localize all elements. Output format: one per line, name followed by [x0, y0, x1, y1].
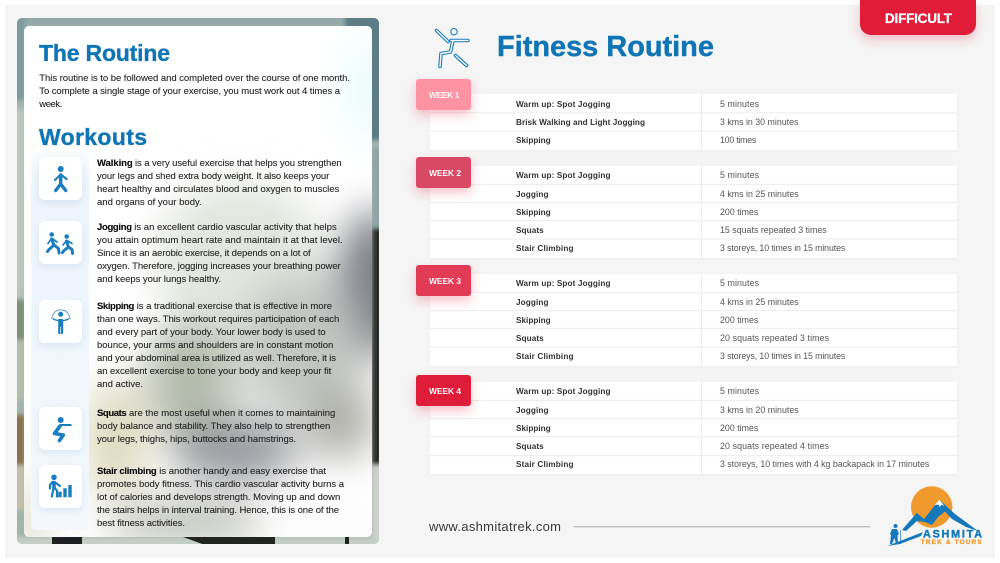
icon: walking	[39, 157, 82, 200]
icon strip	[31, 152, 89, 530]
text: jogging: and keeps your lungs healthy.	[97, 274, 221, 285]
logo: Ashmita Trek and Tours: TREK & TOURS	[921, 539, 982, 546]
table: week 4: 5 minutes	[720, 386, 760, 396]
text: skipping: and every part of your body. Your lower body is used to	[97, 327, 326, 338]
table: week 2: 15 squats repeated 3 times	[720, 225, 827, 235]
text: squats: body balance and stability. They also help to strengthen	[97, 421, 330, 432]
text: jogging: Since it is an aerobic exercise, it depends on a lot of	[97, 248, 311, 259]
text: walking	[97, 158, 342, 208]
table: week 1: 100 times	[720, 135, 757, 145]
footer rule	[574, 526, 870, 528]
text: squats: your legs, thighs, hips, buttocks and hamstrings.	[97, 434, 296, 445]
table: week 3: 200 times	[720, 315, 759, 325]
frosted glass card	[24, 26, 372, 537]
table: week 2: Skipping	[516, 208, 551, 217]
table: week 4: Skipping	[516, 424, 551, 433]
text: walking: Walking	[97, 158, 133, 169]
text: stair climbing: lot of calories and develops strength. Moving up and down	[97, 492, 340, 503]
table: week 2: Stair Climbing	[516, 244, 574, 253]
table: week 2	[416, 157, 957, 258]
text: stair climbing: is another handy and easy exercise that	[159, 466, 326, 477]
text: stair climbing: the stairs helps in interval training. Hence, this is one of the	[97, 505, 339, 516]
tag: week 4	[416, 375, 471, 406]
text: skipping: bounce, your arms and shoulders are in constant motion	[97, 340, 333, 351]
tag: week 3: WEEK 3	[429, 276, 461, 286]
table: week 4: Stair Climbing	[516, 460, 574, 469]
table: week 1: 3 kms in 30 minutes	[720, 117, 799, 127]
table: week 4: 20 squats repeated 4 times	[720, 441, 830, 451]
text: stair climbing	[97, 466, 345, 529]
table: week 2: 3 storeys, 10 times in 15 minutes	[720, 243, 846, 253]
table: week 3: Warm up: Spot Jogging	[516, 279, 610, 288]
text: skipping: is a traditional exercise that is effective in more	[137, 301, 332, 312]
text: skipping: and your abdominal area is utilized as well. Therefore, it is	[97, 353, 336, 364]
text: jogging	[97, 222, 343, 285]
text: stair climbing: best fitness activities.	[97, 518, 185, 529]
table: week 2: 200 times	[720, 207, 759, 217]
logo: Ashmita Trek and Tours: ASHMITA	[923, 528, 982, 540]
table: week 3: 5 minutes	[720, 278, 760, 288]
table: week 1: Warm up: Spot Jogging	[516, 100, 610, 109]
table: week 3: 3 storeys, 10 times in 15 minutes	[720, 351, 846, 361]
text: jogging: you attain optimum heart rate and maintain it at that level.	[97, 235, 343, 246]
text: routine intro: This routine is to be followed and completed over the course of one month.	[39, 73, 350, 84]
icon: skipping	[39, 300, 82, 343]
text: routine intro	[38, 73, 350, 110]
text: squats: Squats	[97, 408, 127, 419]
text: walking: and organs of your body.	[97, 197, 202, 208]
table: week 1: 5 minutes	[720, 99, 760, 109]
panel: routine and workouts	[17, 18, 379, 544]
table: week 1: Skipping	[516, 136, 551, 145]
table: week 4: 3 storeys, 10 times with 4 kg backapack in 17 minutes	[720, 459, 930, 469]
badge: difficult	[860, 0, 976, 35]
text: walking: is a very useful exercise that helps you strengthen	[135, 158, 342, 169]
text: walking: heart healthy and circulates blood and oxygen to muscles	[97, 184, 340, 195]
text: squats: are the most useful when it comes to maintaining	[129, 408, 335, 419]
text: routine intro: To complete a single stage of your exercise, you must work out 4 times a	[39, 86, 341, 97]
text: jogging: Jogging	[97, 222, 132, 233]
text: stair climbing: promotes body fitness. This cardio vascular activity burns a	[97, 479, 345, 490]
tag: week 1	[416, 79, 471, 110]
table: week 4: Warm up: Spot Jogging	[516, 387, 610, 396]
tag: week 2: WEEK 2	[429, 168, 461, 178]
table: week 2: 5 minutes	[720, 170, 760, 180]
text: skipping: an excellent exercise to tone your body and keep your fit	[97, 366, 332, 377]
table: week 3: Skipping	[516, 316, 551, 325]
logo: Ashmita Trek and Tours	[887, 486, 982, 546]
tag: week 3	[416, 265, 471, 296]
table: week 4: Jogging	[516, 406, 548, 415]
table: week 3: Jogging	[516, 298, 548, 307]
table: week 2: Jogging	[516, 190, 548, 199]
text: jogging: oxygen. Therefore, jogging increases your breathing power	[97, 261, 341, 272]
text: routine intro: week.	[38, 99, 62, 110]
icon: jogging	[39, 221, 82, 264]
tag: week 2	[416, 157, 471, 188]
icon: fitness figure	[436, 28, 468, 66]
text: squats	[97, 408, 335, 445]
tag: week 1: WEEK 1	[429, 90, 460, 100]
table: week 3	[416, 265, 957, 366]
table: week 1: Brisk Walking and Light Jogging	[516, 118, 645, 127]
table: week 2: Warm up: Spot Jogging	[516, 171, 610, 180]
text: walking: your legs and shed extra body weight. It also keeps your	[97, 171, 329, 182]
text: jogging: is an excellent cardio vascular activity that helps	[134, 222, 337, 233]
text: skipping: and active.	[97, 379, 143, 390]
text: skipping: than one ways. This workout requires participation of each	[97, 314, 339, 325]
table: week 4	[416, 375, 957, 474]
icon: stair climbing	[39, 465, 82, 508]
table: week 2: Squats	[516, 226, 544, 235]
table: week 1	[416, 79, 957, 150]
text: skipping	[97, 301, 339, 390]
badge: difficult: DIFFICULT	[885, 11, 953, 26]
text: stair climbing: Stair climbing	[97, 466, 157, 477]
background photo frame	[10, 10, 390, 551]
table: week 4: 3 kms in 20 minutes	[720, 405, 799, 415]
table: week 3: 4 kms in 25 minutes	[720, 297, 799, 307]
table: week 3: Stair Climbing	[516, 352, 574, 361]
heading: Workouts: Workouts	[39, 124, 147, 150]
icon: squats	[39, 407, 82, 450]
table: week 3: 20 squats repeated 3 times	[720, 333, 830, 343]
table: week 2: 4 kms in 25 minutes	[720, 189, 799, 199]
table: week 3: Squats	[516, 334, 544, 343]
heading: The Routine: The Routine	[39, 40, 170, 66]
text: skipping: Skipping	[97, 301, 134, 312]
table: week 4: 200 times	[720, 423, 759, 433]
footer website: www.ashmitatrek.com	[428, 519, 561, 534]
tag: week 4: WEEK 4	[429, 386, 461, 396]
table: week 4: Squats	[516, 442, 544, 451]
title: Fitness Routine	[497, 31, 714, 63]
